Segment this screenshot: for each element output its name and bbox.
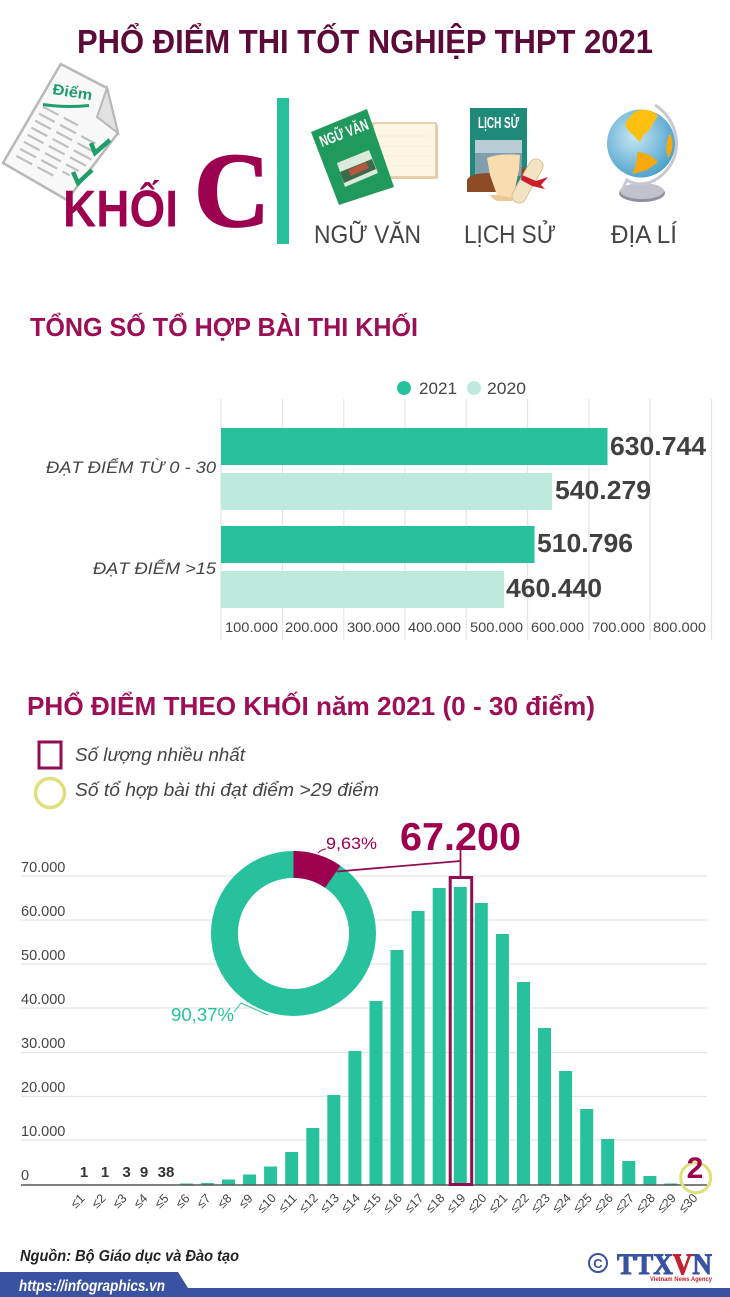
- legend: years: [397, 380, 526, 398]
- x tick labels: ≤16: [380, 1191, 405, 1215]
- footer band: [0, 1272, 730, 1297]
- x tick labels: ≤22: [507, 1191, 532, 1215]
- icon: globe: [607, 105, 677, 202]
- connector from donut to peak: [337, 850, 460, 878]
- icon: history book with scroll: [467, 108, 548, 201]
- y axis labels: 50.000: [21, 948, 65, 964]
- axis baseline: [21, 1184, 707, 1186]
- x tick labels: ≤14: [338, 1191, 363, 1215]
- donut chart: [211, 851, 376, 1016]
- x axis labels: 200.000: [285, 619, 338, 635]
- icon: score sheet: [3, 64, 118, 200]
- value: 630.744: 630.744: [610, 431, 707, 461]
- source: Nguồn: Bộ Giáo dục và Đào tạo: [20, 1248, 239, 1265]
- x tick labels: ≤28: [633, 1191, 658, 1215]
- x tick labels: ≤6: [173, 1191, 193, 1211]
- y axis labels: 0: [21, 1168, 29, 1184]
- donut wedge: 9,63%: [294, 851, 340, 888]
- legend: above 29: Số tổ hợp bài thi đạt điểm >29 điểm: [75, 780, 379, 800]
- x axis labels: 800.000: [653, 619, 706, 635]
- legend: years: 2021: [419, 380, 457, 398]
- category label: above 15: ĐẠT ĐIỂM >15: [93, 559, 217, 578]
- x tick labels: ≤10: [254, 1191, 279, 1215]
- x tick labels: ≤4: [131, 1191, 151, 1211]
- bar: 630.744: [221, 428, 608, 465]
- label: letter C: C: [194, 132, 270, 249]
- x tick labels: ≤25: [570, 1191, 595, 1215]
- y axis labels: 20.000: [21, 1080, 65, 1096]
- y axis labels: 40.000: [21, 992, 65, 1008]
- small-count labels: 1: [80, 1164, 88, 1181]
- value: 2: 2: [687, 1152, 703, 1185]
- x axis labels: 500.000: [470, 619, 523, 635]
- small-count labels: 3: [122, 1164, 131, 1181]
- logo: TTXVN: TTXVN: [617, 1248, 712, 1281]
- legend: highest count: [39, 742, 246, 768]
- x tick labels: ≤17: [402, 1191, 426, 1215]
- x axis labels: 100.000: [225, 619, 278, 635]
- x tick labels: ≤2: [89, 1191, 109, 1211]
- vertical teal divider: [277, 98, 289, 244]
- x tick labels: ≤30: [676, 1191, 700, 1215]
- x axis labels: [225, 619, 706, 635]
- y axis labels: 60.000: [21, 904, 65, 920]
- label: 9,63%: 9,63%: [326, 834, 377, 853]
- title: PHỔ ĐIỂM THI TỐT NGHIỆP THPT 2021: [77, 22, 653, 60]
- x tick labels: ≤13: [317, 1191, 342, 1215]
- x axis labels: 400.000: [408, 619, 461, 635]
- label: 90,37%: 90,37%: [171, 1005, 234, 1025]
- leader: 90,37%: [234, 1003, 268, 1015]
- value: 67.200: 67.200: [400, 816, 521, 859]
- small-count labels: [80, 1164, 174, 1181]
- category label: 0-30: ĐẠT ĐIỂM TỪ 0 - 30: [46, 458, 217, 477]
- x tick labels: [68, 1191, 700, 1215]
- highlight circle: score 30: [681, 1163, 711, 1193]
- logo: TTXVN: Vietnam News Agency: [650, 1277, 713, 1283]
- bar: 510.796: [221, 526, 534, 563]
- small-count labels: 9: [140, 1164, 148, 1181]
- label: ngữ văn: NGỮ VĂN: [314, 220, 421, 249]
- y axis labels: 70.000: [21, 860, 65, 876]
- small-count labels: 38: [158, 1164, 174, 1181]
- x tick labels: ≤23: [528, 1191, 553, 1215]
- icon: score sheet: Điểm: [51, 81, 94, 104]
- x axis labels: 700.000: [592, 619, 645, 635]
- icon: literature book: NGỮ VĂN: [317, 116, 371, 151]
- footer url: https://infographics.vn: [19, 1278, 165, 1295]
- x tick labels: ≤19: [444, 1191, 468, 1215]
- x tick labels: ≤29: [654, 1191, 679, 1215]
- x tick labels: ≤3: [110, 1191, 130, 1211]
- value: 460.440: 460.440: [506, 573, 602, 603]
- value: 540.279: 540.279: [555, 475, 651, 505]
- x tick labels: ≤20: [465, 1191, 489, 1215]
- leader: 9,63%: [318, 849, 326, 853]
- x tick labels: ≤18: [423, 1191, 447, 1215]
- chart: score histogram: [21, 860, 711, 1215]
- highlight box: score 19: [450, 878, 472, 1184]
- chart: total combinations horizontal bars: [46, 380, 712, 640]
- x tick labels: ≤15: [359, 1191, 384, 1215]
- label: lịch sử: LỊCH SỬ: [464, 219, 556, 249]
- legend: years: 2020: [487, 380, 526, 398]
- x tick labels: ≤24: [549, 1191, 574, 1215]
- x axis labels: 600.000: [531, 619, 584, 635]
- legend: above 29: [36, 778, 379, 808]
- histogram bars: [180, 887, 677, 1185]
- x tick labels: ≤26: [591, 1191, 616, 1215]
- logo: TTXVN: C: [593, 1256, 603, 1271]
- x tick labels: ≤8: [215, 1191, 235, 1211]
- y axis labels: [21, 860, 65, 1184]
- x tick labels: ≤21: [486, 1191, 510, 1215]
- x tick labels: ≤9: [236, 1191, 256, 1211]
- small-count labels: 1: [101, 1164, 109, 1181]
- icon: history book with scroll: LỊCH SỬ: [478, 113, 519, 132]
- x tick labels: ≤27: [612, 1191, 637, 1215]
- icon: literature book: [311, 109, 438, 205]
- x tick labels: ≤12: [296, 1191, 321, 1215]
- bar: 540.279: [221, 473, 552, 510]
- x tick labels: ≤5: [152, 1191, 172, 1211]
- x tick labels: ≤1: [68, 1191, 88, 1211]
- label: khối: KHỐI: [63, 180, 178, 238]
- value: 510.796: 510.796: [537, 528, 633, 558]
- y axis labels: 10.000: [21, 1124, 65, 1140]
- y axis labels: 30.000: [21, 1036, 65, 1052]
- heading: score distribution: PHỔ ĐIỂM THEO KHỐI năm 2021 (0 - 30 điểm): [27, 691, 595, 721]
- legend: highest count: Số lượng nhiều nhất: [75, 745, 246, 765]
- x tick labels: ≤11: [276, 1191, 300, 1215]
- bar: 460.440: [221, 571, 504, 608]
- x axis labels: 300.000: [347, 619, 400, 635]
- label: địa lí: ĐỊA LÍ: [611, 220, 677, 249]
- x tick labels: ≤7: [194, 1191, 214, 1211]
- heading: total: TỔNG SỐ TỔ HỢP BÀI THI KHỐI: [30, 312, 418, 342]
